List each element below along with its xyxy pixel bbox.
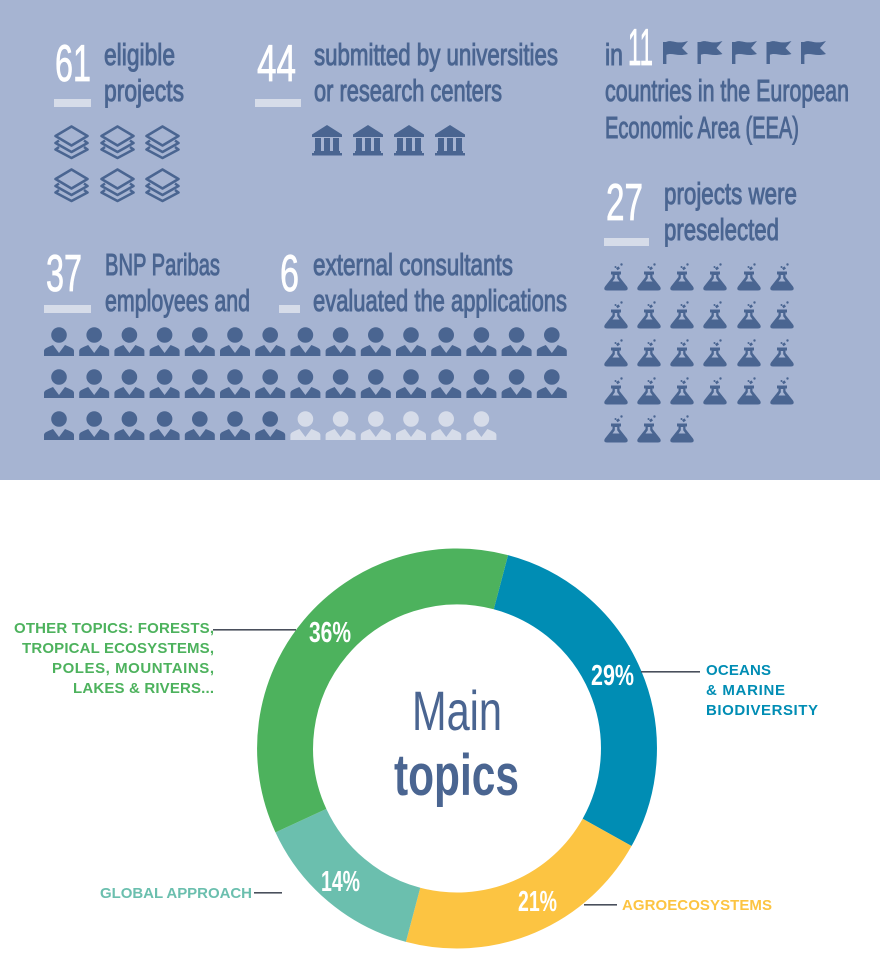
stat: 27 projects were preselected: projects were (664, 176, 797, 211)
callout: other topics: TROPICAL ECOSYSTEMS, (22, 640, 214, 657)
donut chart: main topics (14, 577, 818, 920)
icons: project stacks (56, 126, 178, 201)
callout: oceans and marine biodiversity (641, 662, 818, 719)
callout: other topics: OTHER TOPICS: FORESTS, (14, 620, 214, 637)
stat: 61 eligible projects (54, 35, 184, 108)
chart center title: Main (412, 679, 502, 742)
icons: flasks (604, 263, 794, 442)
segment: global approach 14% (301, 821, 413, 915)
stat: in 11 countries in the European Economic Area (605, 19, 849, 145)
percentage labels: 36% (309, 617, 351, 649)
callout: other topics: POLES, MOUNTAINS, (52, 660, 214, 677)
stat: 27 projects were preselected: 27 (606, 174, 643, 232)
stat: 44 submitted by universities or research centers (255, 35, 558, 108)
percentage labels: 14% (321, 866, 360, 898)
stat: 27 projects were preselected: preselected (664, 212, 779, 247)
stat: 37 BNP Paribas employees: 37 (46, 245, 82, 303)
stat: in 11 countries in the European Economic Area: 11 (628, 19, 653, 77)
icons: university buildings (312, 125, 465, 156)
callout: other topics: LAKES & RIVERS... (73, 680, 214, 697)
callout: global approach: GLOBAL APPROACH (100, 885, 252, 902)
stat: 44 submitted by universities or research centers: or research centers (314, 73, 502, 108)
stat: 6 external consultants: external consultants (313, 247, 513, 282)
callout: oceans and marine biodiversity: BIODIVERSITY (706, 702, 818, 719)
callout: oceans and marine biodiversity: OCEANS (706, 662, 771, 679)
top panel: project statistics (0, 0, 880, 480)
segment: agroecosystems 21% (413, 832, 607, 920)
percentage labels (309, 617, 634, 918)
chart center title (394, 679, 519, 808)
stat: 44 submitted by universities or research centers: 44 (257, 35, 296, 93)
stat: 6 external consultants (279, 245, 567, 318)
icons: evaluators (44, 327, 567, 440)
stat: 27 projects were preselected (604, 174, 797, 247)
stat: 6 external consultants: 6 (280, 245, 299, 303)
callout: agroecosystems: AGROECOSYSTEMS (622, 897, 772, 914)
callout: other topics (14, 620, 296, 697)
callout: oceans and marine biodiversity: & MARINE (706, 682, 785, 699)
stat: 44 submitted by universities or research centers: submitted by universities (314, 37, 558, 72)
stat: 61 eligible projects: eligible (104, 37, 175, 72)
stat: 61 eligible projects: projects (104, 73, 184, 108)
chart center title: topics (394, 743, 519, 808)
percentage labels: 21% (518, 886, 557, 918)
stat: 37 BNP Paribas employees: employees and (105, 283, 250, 318)
percentage labels: 29% (591, 660, 634, 692)
stat: in 11 countries in the European Economic Area: in (605, 37, 623, 72)
segment: other topics 36% (285, 577, 501, 821)
stat: 6 external consultants: evaluated the applications (313, 283, 567, 318)
stat: 37 BNP Paribas employees (44, 245, 250, 318)
segment: oceans and marine biodiversity 29% (501, 582, 629, 832)
icons: flags (663, 41, 826, 64)
stat: 37 BNP Paribas employees: BNP Paribas (105, 247, 220, 282)
stat: 61 eligible projects: 61 (55, 35, 91, 93)
